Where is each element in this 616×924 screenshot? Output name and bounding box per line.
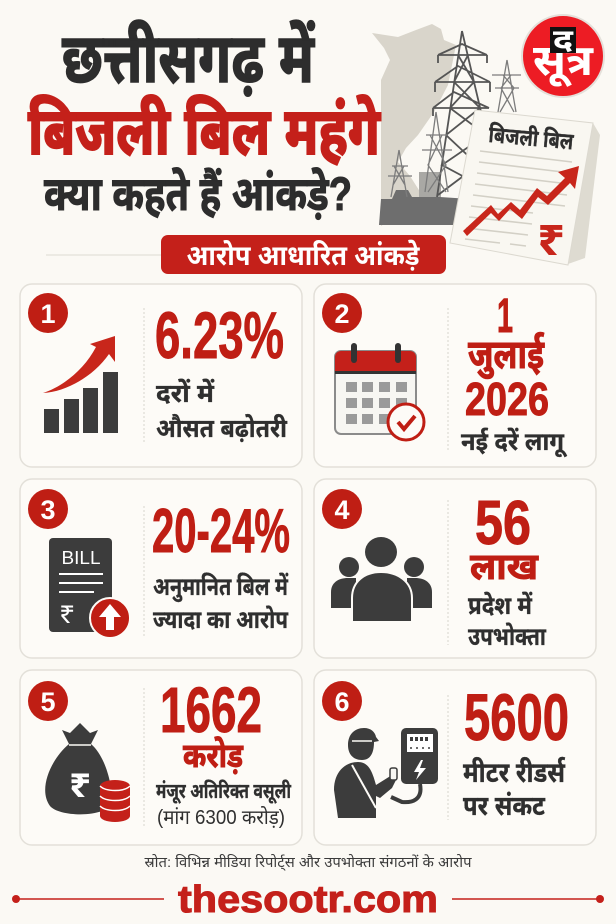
value: 20-24% (152, 497, 290, 566)
footer website: thesootr.com (178, 879, 438, 921)
badge 4 (322, 489, 362, 529)
panel 6: meter readers (314, 670, 596, 845)
caption: ज्यादा का आरोप (153, 605, 289, 634)
bill rupee symbol: ₹ (537, 213, 565, 266)
title line 1: छत्तीसगढ़ में (62, 20, 315, 97)
caption (153, 572, 289, 634)
caption: औसत बढ़ोतरी (156, 413, 288, 443)
badge 3 (28, 489, 68, 529)
value: 5600 (464, 680, 569, 754)
caption (156, 779, 292, 829)
caption: मीटर रीडर्स (463, 756, 566, 788)
panel 3: estimated bill excess (20, 479, 302, 658)
badge 1: 1 (40, 299, 56, 329)
badge 6 (322, 681, 362, 721)
caption (463, 756, 566, 821)
icon: meter reader (334, 728, 438, 818)
panel 2: new rates date (314, 284, 596, 467)
panel 5: approved recovery (20, 670, 302, 845)
icon: rising bar chart (43, 336, 118, 433)
value: लाख (470, 546, 539, 587)
value: 1 (497, 290, 513, 343)
logo: the sootr (522, 15, 604, 97)
value: 56 (475, 489, 531, 558)
footer website (12, 879, 604, 921)
badge 2: 2 (334, 299, 350, 329)
icon: money bag and coins: ₹ (69, 764, 91, 806)
bill rising arrow (463, 166, 579, 236)
value: 1662 (160, 674, 262, 746)
icon: bill with up arrow (49, 538, 130, 638)
caption (468, 591, 547, 651)
value: करोड़ (183, 737, 244, 775)
value (465, 290, 549, 425)
icon: money bag and coins (45, 723, 130, 822)
badge 6: 6 (334, 687, 350, 717)
badge 5: 5 (40, 687, 56, 717)
bill heading: बिजली बिल (488, 121, 575, 154)
title line 2: बिजली बिल महंगे (28, 94, 381, 168)
badge 5 (28, 681, 68, 721)
illustration: electricity bill document (450, 110, 600, 266)
icon: bill with up arrow: ₹ (59, 598, 75, 629)
logo: the sootr: सूत्र (533, 37, 594, 87)
icon: group of people (331, 537, 432, 622)
source note: स्रोत: विभिन्न मीडिया रिपोर्ट्स और उपभोक्ता संगठनों के आरोप (144, 853, 473, 872)
badge 2 (322, 293, 362, 333)
caption: (मांग 6300 करोड़) (157, 805, 285, 829)
caption: प्रदेश में (468, 591, 533, 620)
panel 4: consumers (314, 479, 596, 658)
value (160, 674, 262, 775)
caption: अनुमानित बिल में (153, 572, 289, 602)
caption (156, 378, 288, 443)
value (470, 489, 539, 587)
caption: दरों में (156, 378, 215, 408)
caption: मंजूर अतिरिक्त वसूली (156, 779, 292, 804)
caption: उपभोक्ता (468, 622, 547, 651)
icon: calendar (335, 343, 424, 440)
badge 4: 4 (334, 495, 350, 525)
value: जुलाई (468, 332, 545, 379)
caption: पर संकट (463, 791, 545, 821)
caption: नई दरें लागू (461, 427, 568, 458)
value: 2026 (465, 373, 549, 425)
icon: bill with up arrow: BILL (62, 548, 100, 568)
subheading banner (46, 235, 446, 274)
title (28, 20, 381, 220)
illustration: map and power towers (372, 24, 521, 226)
title line 3: क्या कहते हैं आंकड़े? (44, 167, 352, 220)
badge 3: 3 (40, 495, 56, 525)
subheading banner: आरोप आधारित आंकड़े (186, 238, 420, 271)
panel 1: average rate rise (20, 284, 302, 467)
logo: the sootr: द (553, 24, 574, 57)
badge 1 (28, 293, 68, 333)
value: 6.23% (155, 298, 284, 372)
